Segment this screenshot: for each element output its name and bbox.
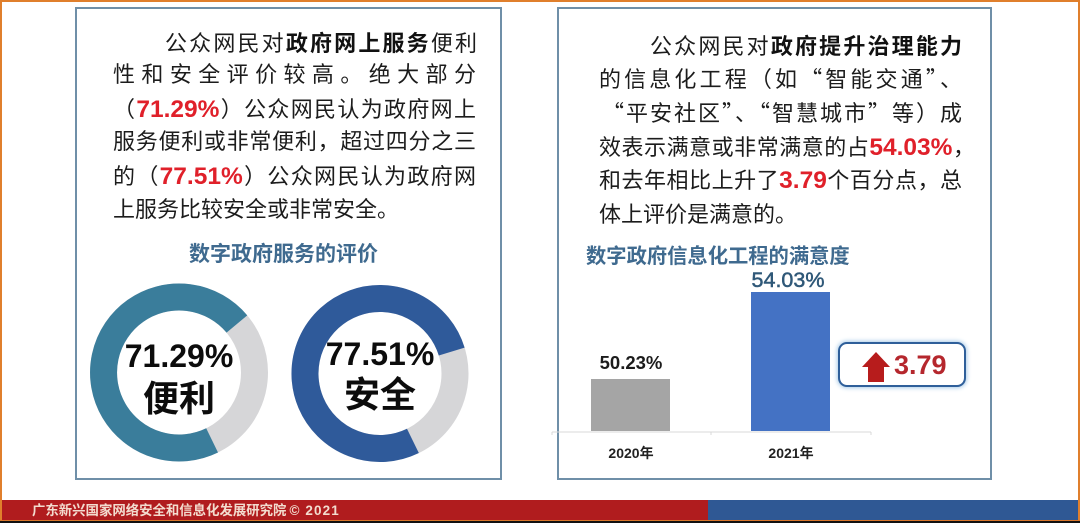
text block: service evaluation paragraph: 上服务比较安全或非常安全。: [113, 192, 399, 224]
donut chart: security 77.51%: 77.51%: [326, 336, 434, 372]
donut chart: convenience 71.29%: 便利: [143, 370, 215, 422]
heading: satisfaction chart: 数字政府信息化工程的满意度: [586, 239, 850, 269]
bottom black edge: [0, 521, 1080, 523]
text block: service evaluation paragraph: 性和安全评价较高。绝大部分: [113, 57, 476, 89]
text block: project satisfaction paragraph: 效表示满意或非常满意的占54.03%，: [599, 130, 975, 162]
callout: increase of 3.79 points: [838, 342, 966, 387]
bar: 2020: 2020年: [608, 445, 654, 461]
text block: project satisfaction paragraph: 的信息化工程（如“智能交通”、: [599, 62, 962, 94]
footer blue segment: [708, 500, 1078, 520]
bar chart: satisfaction 2020 vs 2021: [552, 268, 872, 461]
text block: service evaluation paragraph: 服务便利或非常便利，超过四分之三: [113, 124, 476, 156]
text block: project satisfaction paragraph: [599, 29, 975, 229]
bar: 2021: [751, 268, 830, 461]
donut chart: security 77.51%: 安全: [344, 366, 416, 418]
donut chart: convenience 71.29%: 71.29%: [125, 338, 233, 374]
bar: 2020: 50.23%: [600, 352, 662, 373]
donut chart: security 77.51%: [291, 285, 468, 462]
text block: project satisfaction paragraph: “平安社区”、“智慧城市”等）成: [602, 96, 962, 128]
callout value: 3.79: [894, 350, 947, 380]
bar: 2021: 2021年: [768, 445, 814, 461]
donut chart: convenience 71.29%: [90, 284, 268, 462]
text block: service evaluation paragraph: （71.29%）公众网民认为政府网上: [113, 92, 476, 124]
footer orange line: [0, 520, 1080, 521]
bar: 2020: [591, 352, 670, 461]
text block: project satisfaction paragraph: 公众网民对政府提升治理能力: [650, 29, 962, 61]
text block: service evaluation paragraph: 公众网民对政府网上服务便利: [165, 26, 477, 58]
panel: satisfaction with digital government projects: [557, 7, 992, 480]
panel: digital government service evaluation: [75, 7, 502, 480]
text block: service evaluation paragraph: [113, 26, 477, 224]
bar: 2021: 54.03%: [752, 268, 824, 292]
text block: project satisfaction paragraph: 和去年相比上升了3.79个百分点，总: [599, 163, 962, 195]
heading: service evaluation chart: 数字政府服务的评价: [189, 238, 378, 268]
icon: red up arrow: [862, 352, 890, 382]
footer text: publisher and copyright: 广东新兴国家网络安全和信息化发展研究院 © 2021: [32, 499, 340, 519]
footer bar: [2, 500, 1078, 520]
text block: service evaluation paragraph: 的（77.51%）公众网民认为政府网: [113, 159, 476, 191]
text block: project satisfaction paragraph: 体上评价是满意的。: [599, 197, 797, 229]
